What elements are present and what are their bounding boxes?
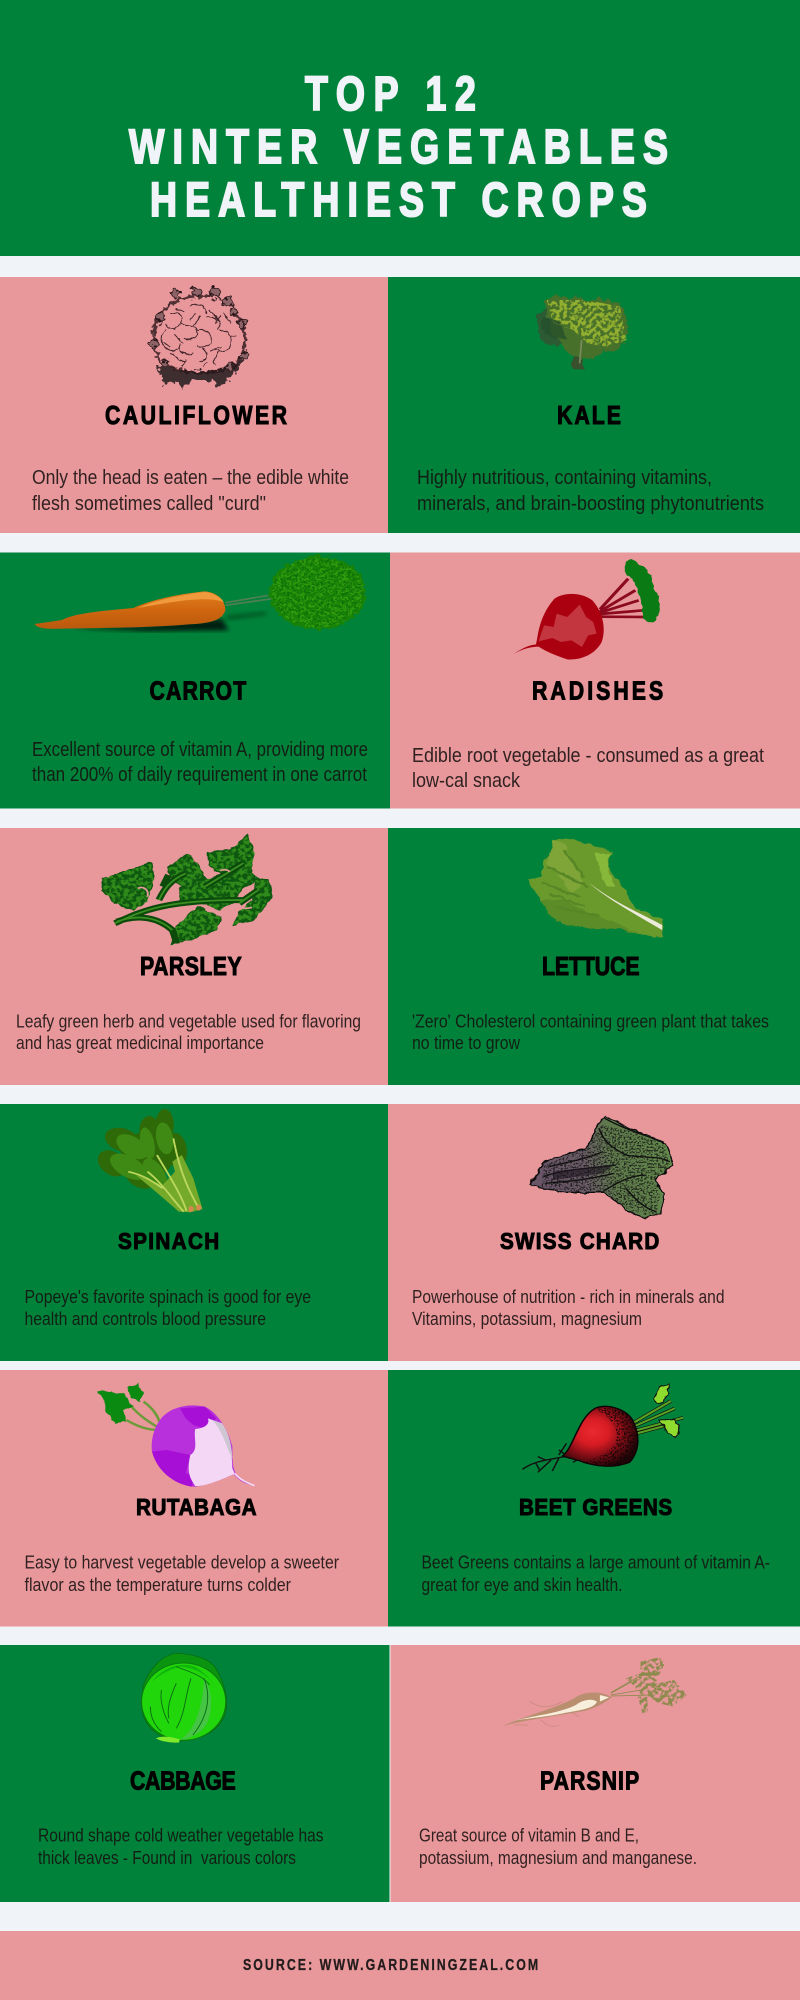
description: beet greens: great for eye and skin health. <box>422 1575 622 1595</box>
description: rutabaga: Easy to harvest vegetable develop a sweeter <box>24 1552 339 1572</box>
description: cabbage: Round shape cold weather vegetable has <box>38 1826 324 1846</box>
heading: cauliflower: CAULIFLOWER <box>105 401 287 431</box>
heading: swiss chard: SWISS CHARD <box>500 1228 659 1254</box>
description: radishes: low-cal snack <box>412 770 521 792</box>
icon: parsnip <box>503 1657 687 1726</box>
description: carrot <box>32 739 368 786</box>
icon: cabbage <box>141 1653 227 1743</box>
title: TOP 12 <box>305 68 476 121</box>
icon: kale <box>537 296 627 370</box>
icon: spinach <box>92 1109 203 1212</box>
description: kale: Highly nutritious, containing vitamins, <box>417 467 712 489</box>
heading: cabbage: CABBAGE <box>130 1767 236 1796</box>
source text: SOURCE: WWW.GARDENINGZEAL.COM <box>243 1956 538 1973</box>
icon: lettuce <box>528 838 663 937</box>
description: lettuce: no time to grow <box>412 1033 521 1053</box>
icon: rutabaga <box>97 1384 255 1487</box>
icon: swiss chard <box>530 1117 674 1218</box>
description: parsley <box>16 1012 361 1053</box>
description: rutabaga <box>24 1552 339 1595</box>
heading: parsnip: PARSNIP <box>540 1767 639 1796</box>
title: WINTER VEGETABLES <box>129 121 668 174</box>
description: parsley: Leafy green herb and vegetable used for flavoring <box>16 1012 361 1032</box>
heading: lettuce: LETTUCE <box>542 952 640 982</box>
description: spinach <box>24 1287 311 1329</box>
panel: cabbage <box>0 1645 390 1902</box>
description: cabbage <box>38 1826 324 1868</box>
panel: parsley <box>0 828 388 1085</box>
panel: carrot <box>0 552 390 808</box>
header panel <box>0 0 800 256</box>
description: swiss chard: Powerhouse of nutrition - rich in minerals and <box>412 1287 724 1307</box>
heading: parsley: PARSLEY <box>140 952 242 982</box>
description: spinach: Popeye's favorite spinach is good for eye <box>24 1287 311 1307</box>
description: carrot: Excellent source of vitamin A, providing more <box>32 739 368 761</box>
panel: lettuce <box>388 828 800 1085</box>
heading: beet greens: BEET GREENS <box>519 1494 672 1520</box>
panel: swiss chard <box>388 1104 800 1361</box>
icon: beet <box>522 1384 683 1472</box>
description: spinach: health and controls blood pressure <box>24 1309 266 1329</box>
panel: kale <box>388 277 800 533</box>
heading: carrot: CARROT <box>150 677 247 706</box>
description: parsley: and has great medicinal importance <box>16 1033 264 1053</box>
description: cauliflower <box>32 467 349 515</box>
icon: cauliflower <box>150 287 248 390</box>
icon: radish <box>513 559 660 659</box>
title: HEALTHIEST CROPS <box>150 174 647 227</box>
heading: radishes: RADISHES <box>532 677 663 706</box>
heading: spinach: SPINACH <box>118 1228 219 1254</box>
icon: carrot <box>35 556 366 631</box>
description: cauliflower: flesh sometimes called "curd" <box>32 493 266 515</box>
description: kale: minerals, and brain-boosting phytonutrients <box>417 493 764 515</box>
description: beet greens <box>422 1552 770 1595</box>
description: parsnip: potassium, magnesium and manganese. <box>419 1848 697 1868</box>
description: carrot: than 200% of daily requirement in one carrot <box>32 764 367 786</box>
title <box>129 68 668 227</box>
heading: kale: KALE <box>557 401 621 431</box>
panel: beet greens <box>388 1370 800 1626</box>
description: swiss chard: Vitamins, potassium, magnesium <box>412 1309 642 1329</box>
panel: parsnip <box>390 1645 800 1902</box>
description: parsnip: Great source of vitamin B and E, <box>419 1826 639 1846</box>
icon: parsley <box>101 834 273 945</box>
description: rutabaga: flavor as the temperature turns colder <box>24 1575 291 1595</box>
description: lettuce <box>412 1012 769 1053</box>
description: radishes: Edible root vegetable - consumed as a great <box>412 745 764 767</box>
footer panel <box>0 1931 800 2000</box>
description: cabbage: thick leaves - Found in various colors <box>38 1848 296 1868</box>
panel: spinach <box>0 1104 388 1361</box>
panel: rutabaga <box>0 1370 388 1626</box>
panel: radishes <box>390 552 800 808</box>
description: radishes <box>412 745 764 792</box>
description: kale <box>417 467 764 515</box>
description: parsnip <box>419 1826 697 1868</box>
description: swiss chard <box>412 1287 724 1329</box>
panel: cauliflower <box>0 277 388 533</box>
description: cauliflower: Only the head is eaten – the edible white <box>32 467 349 489</box>
heading: rutabaga: RUTABAGA <box>136 1494 257 1520</box>
